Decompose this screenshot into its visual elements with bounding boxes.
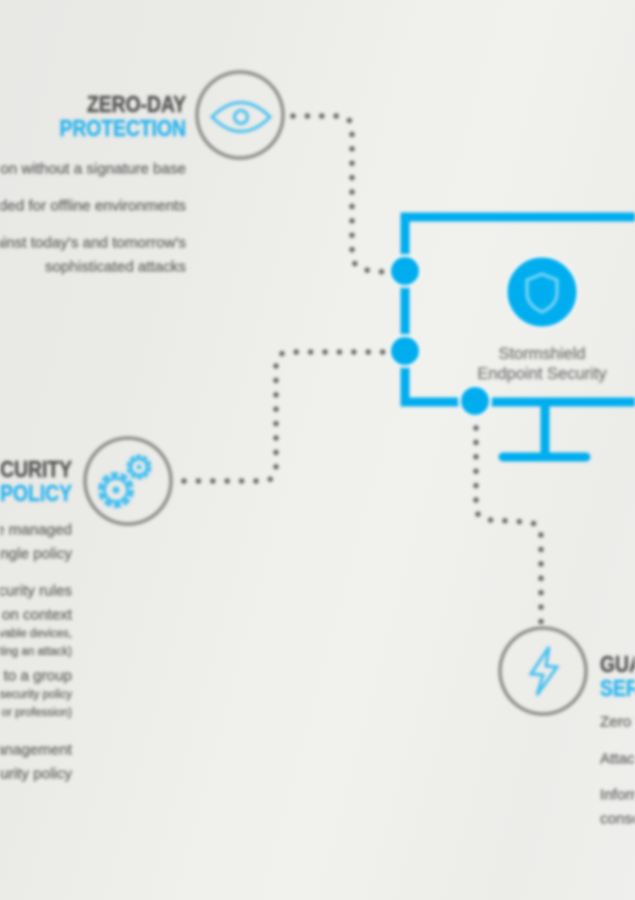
panel: zero-day protection: [0, 72, 283, 276]
monitor label: Stormshield: [498, 345, 586, 363]
junction node middle: [390, 336, 420, 366]
junction node top: [390, 256, 420, 286]
icon: eye in circle: [197, 72, 283, 158]
monitor label: [477, 345, 607, 383]
text: security policy benefits: [0, 522, 73, 782]
junction node bottom: [460, 386, 490, 416]
heading: zero-day protection: PROTECTION: [59, 117, 186, 141]
monitor label: Endpoint Security: [477, 365, 607, 383]
icon: shield badge: [506, 256, 578, 328]
icon: gears in circle: [85, 438, 171, 524]
connector: monitor to guaranteed service: [476, 428, 541, 624]
panel: security policy: [0, 438, 171, 782]
heading: security policy: [0, 458, 72, 506]
monitor stand: [503, 402, 586, 457]
monitor frame: [405, 217, 635, 402]
panel: guaranteed service: [500, 628, 635, 828]
monitor illustration: [390, 217, 635, 457]
connector: zero-day to monitor: [293, 116, 384, 272]
text: zero-day benefits: sophisticated attacks: [45, 258, 186, 276]
text: guaranteed service benefits: [600, 714, 635, 828]
text: zero-day benefits: [0, 160, 186, 276]
heading: security policy: POLICY: [0, 482, 72, 506]
heading: zero-day protection: ZERO-DAY: [87, 93, 186, 117]
heading: zero-day protection: [59, 93, 186, 141]
heading: guaranteed service: [600, 653, 635, 701]
icon: lightning in circle: [500, 628, 586, 714]
connector: security policy to monitor: [184, 352, 384, 481]
